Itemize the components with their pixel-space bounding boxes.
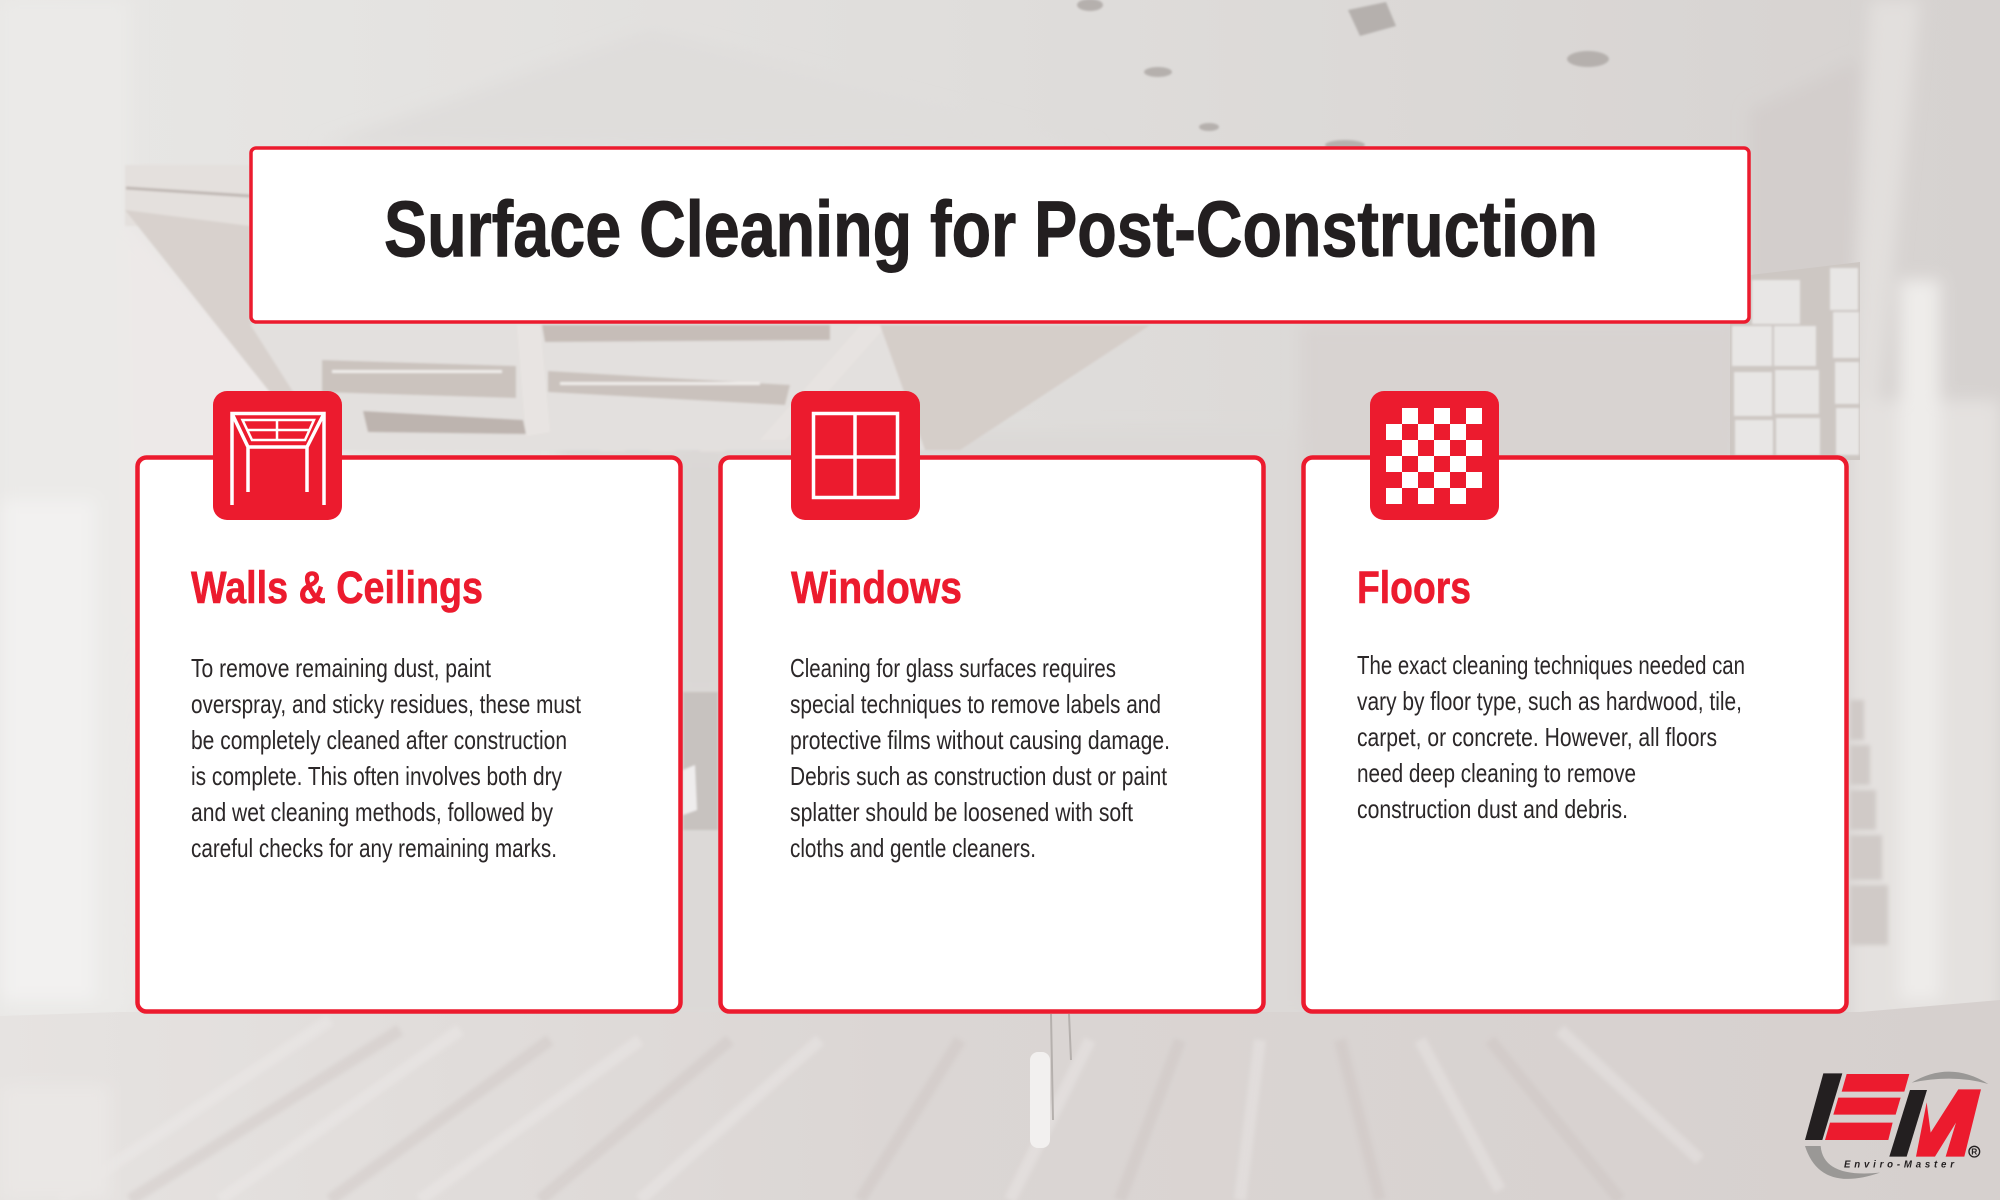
title panel bbox=[251, 148, 1749, 322]
ceiling frame bbox=[125, 165, 1150, 450]
text: windows: Cleaning for glass surfaces requires bbox=[790, 653, 1116, 683]
text: walls and ceilings: and wet cleaning methods, followed by bbox=[191, 797, 553, 827]
logo: Enviro-Master: R bbox=[1971, 1147, 1977, 1157]
text: floors: vary by floor type, such as hardwood, tile, bbox=[1357, 686, 1742, 716]
text: walls and ceilings: be completely cleaned after construction bbox=[191, 725, 567, 755]
text: walls and ceilings: is complete. This often involves both dry bbox=[191, 761, 562, 791]
text: walls and ceilings: To remove remaining dust, paint bbox=[191, 653, 492, 683]
text: walls and ceilings bbox=[191, 653, 582, 863]
text: floors: need deep cleaning to remove bbox=[1357, 758, 1636, 788]
icon: window bbox=[791, 391, 920, 520]
panel: walls and ceilings bbox=[138, 391, 680, 1012]
floor pipe bbox=[1030, 1014, 1071, 1148]
sofa seen between cards bbox=[683, 692, 718, 830]
text: windows: Debris such as construction dust or paint bbox=[790, 761, 1168, 791]
floor bbox=[0, 1000, 2000, 1200]
heading: walls and ceilings: Walls & Ceilings bbox=[191, 562, 483, 613]
arched window bbox=[1730, 262, 1860, 460]
staircase bbox=[1850, 700, 1888, 945]
panel: floors bbox=[1304, 391, 1846, 1012]
heading: floors: Floors bbox=[1357, 562, 1471, 613]
text: walls and ceilings: overspray, and sticky residues, these must bbox=[191, 689, 582, 719]
icon: walls and ceilings bbox=[213, 391, 342, 520]
logo: Enviro-Master: Enviro-Master bbox=[1844, 1159, 1955, 1170]
text: floors: The exact cleaning techniques needed can bbox=[1357, 650, 1745, 680]
ceiling lights bbox=[1077, 0, 1609, 150]
text: walls and ceilings: careful checks for any remaining marks. bbox=[191, 833, 557, 863]
text: floors: carpet, or concrete. However, all floors bbox=[1357, 722, 1717, 752]
heading: windows: Windows bbox=[791, 562, 962, 613]
text: windows bbox=[790, 653, 1170, 863]
text: windows: protective films without causing damage. bbox=[790, 725, 1170, 755]
text: windows: splatter should be loosened with soft bbox=[790, 797, 1134, 827]
text: windows: cloths and gentle cleaners. bbox=[790, 833, 1036, 863]
title text: Surface Cleaning for Post-Construction bbox=[384, 184, 1598, 273]
text: windows: special techniques to remove labels and bbox=[790, 689, 1161, 719]
logo: Enviro-Master bbox=[1805, 1072, 1988, 1179]
icon: checkerboard floor bbox=[1370, 391, 1499, 520]
text: floors bbox=[1357, 650, 1745, 824]
text: floors: construction dust and debris. bbox=[1357, 794, 1628, 824]
panel: windows bbox=[720, 391, 1264, 1012]
